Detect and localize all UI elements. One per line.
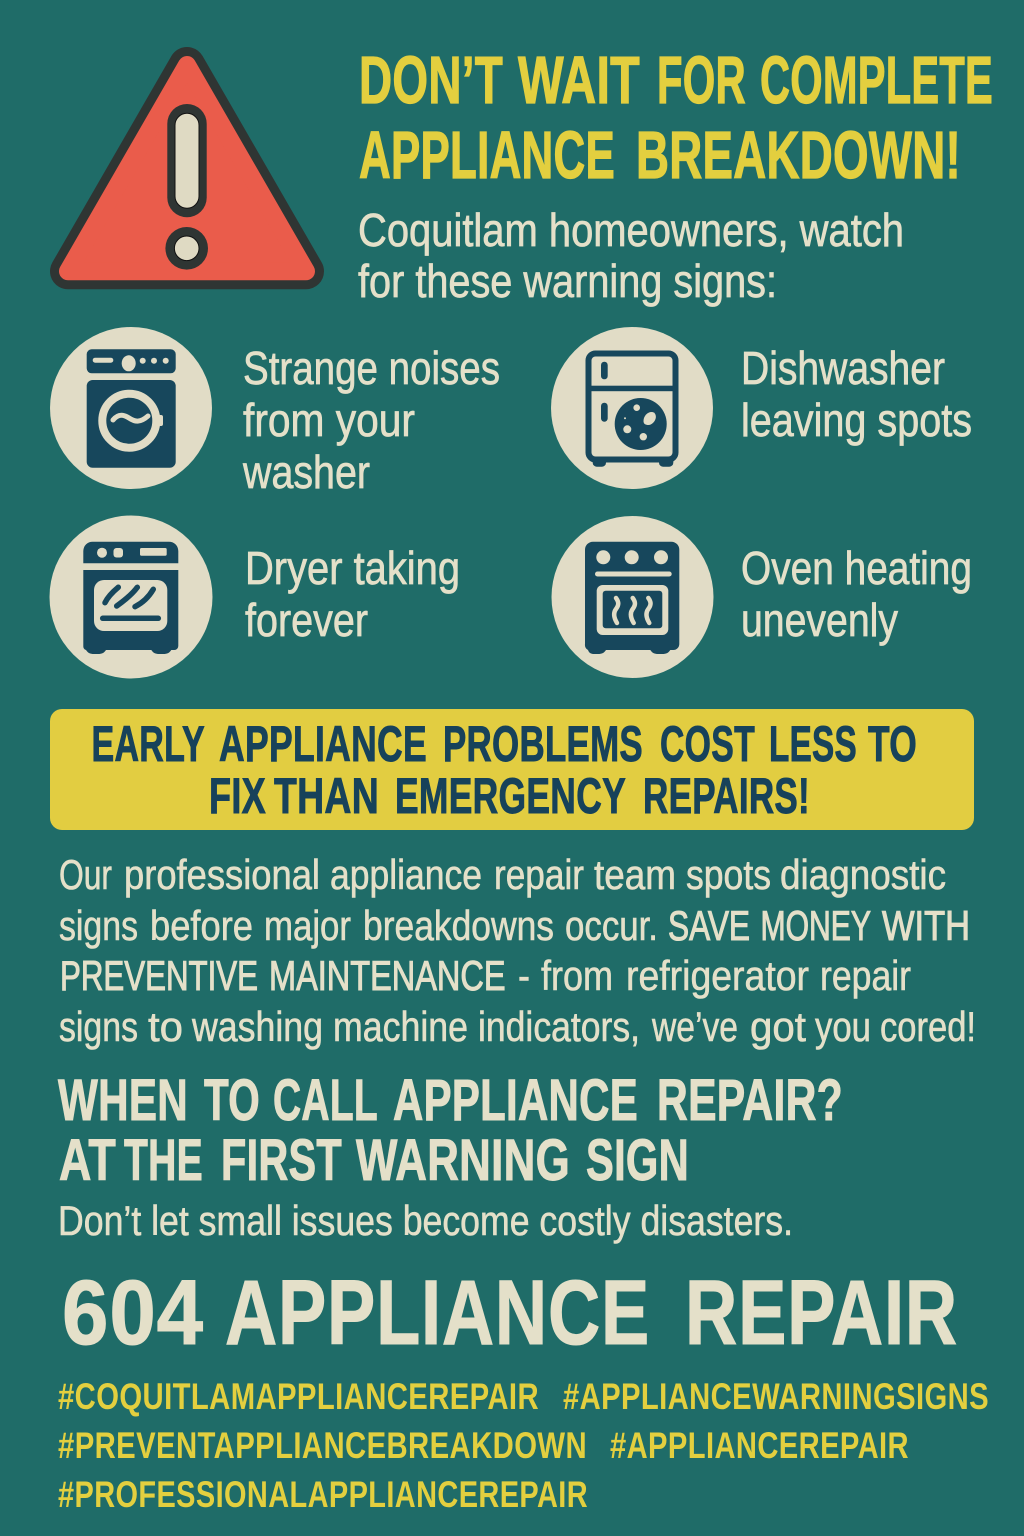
title <box>359 43 993 193</box>
heading: when to call: FIRST <box>221 1128 342 1193</box>
paragraph: cored! <box>880 1003 976 1050</box>
paragraph: appliance <box>330 851 482 898</box>
paragraph: breakdowns <box>363 902 554 949</box>
paragraph: refrigerator <box>626 952 809 999</box>
heading: when to call: SIGN <box>586 1128 689 1193</box>
paragraph <box>59 851 976 1050</box>
callout banner: COST <box>660 716 755 772</box>
callout banner: PROBLEMS <box>443 716 643 772</box>
title: WAIT <box>518 43 640 118</box>
paragraph: we’ve <box>651 1003 738 1050</box>
text: oven sign <box>741 542 972 646</box>
paragraph: got <box>750 1003 806 1050</box>
text: dryer sign <box>245 542 460 646</box>
paragraph: spots <box>686 851 771 898</box>
hashtags <box>58 1376 989 1515</box>
title: FOR <box>657 43 746 118</box>
paragraph: PREVENTIVE <box>60 952 258 999</box>
callout banner: TO <box>868 716 917 772</box>
hashtags: #COQUITLAMAPPLIANCEREPAIR <box>58 1376 539 1417</box>
brand name <box>62 1262 958 1364</box>
text: dryer sign: Dryer taking <box>245 542 460 594</box>
title: APPLIANCE <box>359 118 615 193</box>
paragraph: WITH <box>882 902 970 949</box>
paragraph: washing <box>191 1003 323 1050</box>
paragraph: signs <box>59 902 138 949</box>
callout banner <box>50 709 974 830</box>
text: dishwasher sign: Dishwasher <box>741 342 945 394</box>
paragraph: professional <box>124 851 320 898</box>
paragraph: - <box>518 952 530 999</box>
callout banner: LESS <box>769 716 857 772</box>
text: washer sign: washer <box>242 446 370 498</box>
paragraph: machine <box>333 1003 468 1050</box>
paragraph: SAVE <box>668 902 750 949</box>
paragraph: Our <box>59 851 112 898</box>
title: DON’T <box>359 43 503 118</box>
text: washer sign: from your <box>243 394 415 446</box>
icon: dryer <box>50 516 212 678</box>
text: oven sign: unevenly <box>741 594 898 646</box>
hashtags: #PREVENTAPPLIANCEBREAKDOWN <box>58 1425 587 1466</box>
text: washer sign <box>242 342 500 498</box>
heading: when to call: WHEN <box>58 1068 188 1133</box>
subtitle <box>358 204 904 307</box>
paragraph: MONEY <box>760 902 871 949</box>
paragraph: from <box>541 952 613 999</box>
text: washer sign: Strange noises <box>243 342 500 394</box>
paragraph: before <box>150 902 253 949</box>
paragraph: occur. <box>565 902 658 949</box>
paragraph: repair <box>494 851 584 898</box>
heading: when to call: CALL <box>273 1068 378 1133</box>
icon: washer <box>50 327 212 489</box>
subtitle: for these warning signs: <box>358 255 777 307</box>
heading: when to call: TO <box>204 1068 260 1133</box>
text: dishwasher sign <box>741 342 972 446</box>
paragraph: you <box>815 1003 871 1050</box>
paragraph: signs <box>59 1003 138 1050</box>
text: oven sign: Oven heating <box>741 542 972 594</box>
text: small issues line: Don’t let small issues become costly disasters. <box>58 1197 793 1244</box>
callout banner: THAN <box>274 768 379 824</box>
paragraph: diagnostic <box>780 851 946 898</box>
heading: when to call: APPLIANCE <box>393 1068 638 1133</box>
subtitle: Coquitlam homeowners, watch <box>358 204 904 256</box>
callout banner: EARLY <box>92 716 205 772</box>
paragraph: indicators, <box>478 1003 640 1050</box>
heading: when to call: THE <box>124 1128 203 1193</box>
text: dishwasher sign: leaving spots <box>741 394 972 446</box>
heading: when to call: REPAIR? <box>657 1068 843 1133</box>
paragraph: MAINTENANCE <box>269 952 506 999</box>
brand name: REPAIR <box>685 1262 958 1364</box>
brand name: APPLIANCE <box>225 1262 650 1364</box>
callout banner: REPAIRS! <box>643 768 810 824</box>
brand name: 604 <box>62 1262 204 1364</box>
icon: warning triangle <box>68 65 306 271</box>
paragraph: team <box>594 851 676 898</box>
callout banner: APPLIANCE <box>219 716 427 772</box>
callout banner: EMERGENCY <box>395 768 626 824</box>
icon: oven <box>552 516 714 678</box>
hashtags: #PROFESSIONALAPPLIANCEREPAIR <box>58 1474 588 1515</box>
text: dryer sign: forever <box>245 594 368 646</box>
paragraph: major <box>264 902 351 949</box>
callout banner: FIX <box>209 768 266 824</box>
heading: when to call: WARNING <box>356 1128 570 1193</box>
paragraph: repair <box>820 952 911 999</box>
icon: dishwasher <box>551 327 713 489</box>
hashtags: #APPLIANCEREPAIR <box>610 1425 909 1466</box>
heading: when to call <box>58 1068 843 1193</box>
paragraph: to <box>148 1003 183 1050</box>
heading: when to call: AT <box>59 1128 116 1193</box>
